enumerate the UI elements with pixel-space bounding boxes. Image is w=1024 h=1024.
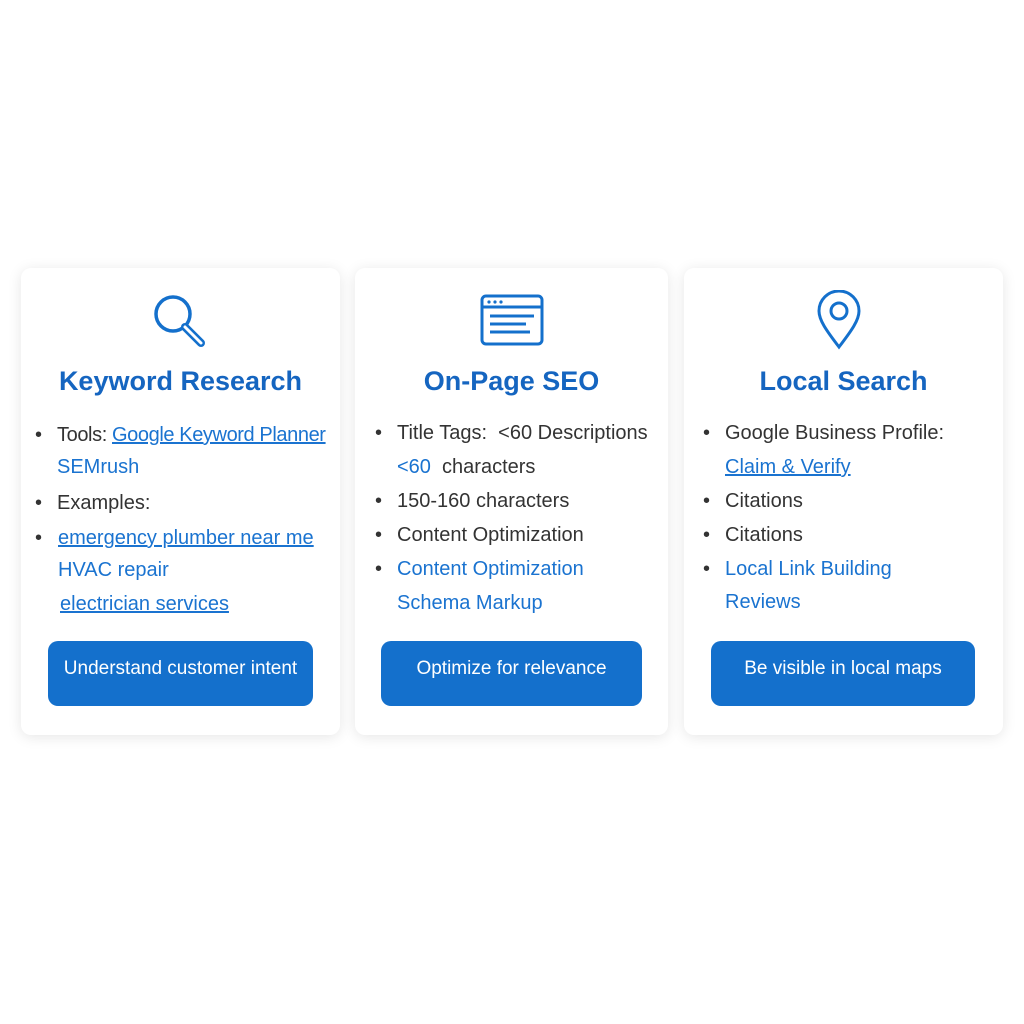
bullet list: • (35, 492, 42, 514)
bullet list: 150-160 characters (397, 490, 569, 512)
bullet list (375, 422, 648, 614)
bullet list: • (375, 524, 382, 546)
bullet list: emergency plumber near me (58, 527, 314, 549)
bullet list: • (703, 490, 710, 512)
bullet list: • (375, 490, 382, 512)
button (381, 641, 642, 706)
bullet list: • (35, 424, 42, 446)
button (711, 641, 975, 706)
icon: map pin (818, 290, 860, 350)
bullet list: • (375, 422, 382, 444)
bullet list (703, 422, 944, 613)
bullet list: <60 characters (397, 456, 535, 478)
bullet list: • (703, 422, 710, 444)
bullet list: Local Link Building (725, 558, 892, 580)
bullet list (35, 424, 326, 615)
bullet list: SEMrush (57, 456, 139, 478)
bullet list: Schema Markup (397, 592, 543, 614)
card: local search (684, 268, 1003, 735)
bullet list: Examples: (57, 492, 150, 514)
button (48, 641, 313, 706)
icon: browser window (480, 294, 544, 346)
bullet list: Title Tags: <60 Descriptions (397, 422, 648, 444)
bullet list: Claim & Verify (725, 456, 851, 478)
bullet list: • (375, 558, 382, 580)
bullet list: Google Business Profile: (725, 422, 944, 444)
bullet list: • (35, 527, 42, 549)
bullet list: Citations (725, 524, 803, 546)
button: Understand customer intent (64, 658, 297, 679)
card: on-page seo (355, 268, 668, 735)
bullet list: Content Optimization (397, 558, 584, 580)
heading: Keyword Research (59, 366, 302, 396)
button: Optimize for relevance (416, 658, 607, 679)
bullet list: Citations (725, 490, 803, 512)
heading: On-Page SEO (424, 366, 599, 396)
bullet list: Tools: Google Keyword Planner (57, 424, 326, 446)
bullet list: electrician services (60, 593, 229, 615)
bullet list: Reviews (725, 591, 801, 613)
bullet list: Content Optimization (397, 524, 584, 546)
icon: magnifier (154, 295, 205, 347)
card: keyword research (21, 268, 340, 735)
bullet list: • (703, 524, 710, 546)
bullet list: • (703, 558, 710, 580)
bullet list: HVAC repair (58, 559, 169, 581)
button: Be visible in local maps (744, 658, 942, 679)
heading: Local Search (759, 366, 928, 396)
